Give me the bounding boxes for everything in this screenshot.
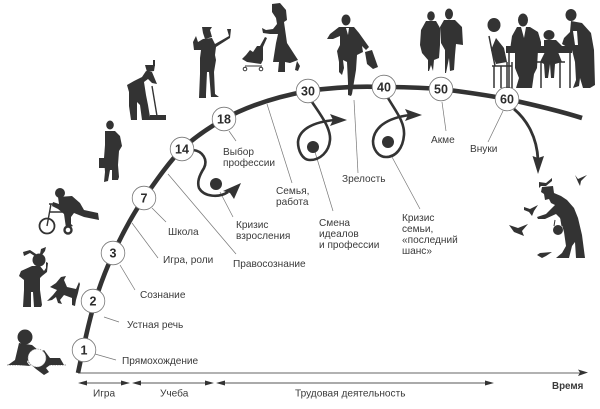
arrow from 60 (514, 109, 544, 174)
silhouette: crawling baby (7, 330, 66, 375)
silhouette: woman with stroller (242, 3, 300, 72)
stage labels: и профессии (319, 239, 379, 251)
silhouette: couple (420, 8, 463, 73)
stage labels: Внуки (470, 144, 497, 155)
stage labels: Прямохождение (122, 356, 199, 367)
silhouette: child on tricycle (40, 188, 99, 234)
stage labels: профессии (223, 157, 275, 169)
age markers: 2 (90, 294, 97, 308)
stage labels: Устная речь (127, 320, 183, 331)
stage labels: Акме (431, 135, 455, 146)
silhouette: policeman (193, 27, 231, 98)
age markers: 3 (110, 246, 117, 260)
stage labels: работа (276, 196, 309, 208)
stage labels: Зрелость (342, 174, 386, 185)
age markers (72, 75, 519, 362)
stage labels: Смена (319, 218, 350, 229)
silhouette: dog (47, 276, 80, 306)
stage labels: Сознание (140, 290, 186, 301)
period labels: Учеба (160, 388, 189, 400)
period arrows (78, 380, 494, 386)
silhouette: family at table (488, 9, 595, 88)
period labels: Игра (93, 388, 116, 400)
age markers: 7 (141, 192, 148, 206)
silhouette: running businessman (327, 14, 378, 96)
silhouette: man with briefcase (99, 120, 122, 182)
crisis loop at 14 (193, 150, 241, 199)
stage labels: Выбор (223, 146, 254, 158)
stage labels: Кризис (236, 220, 268, 231)
age markers: 30 (301, 84, 315, 98)
silhouette: old man feeding birds (537, 186, 585, 258)
life curve (78, 87, 582, 373)
age markers: 14 (175, 142, 189, 156)
stage labels: Игра, роли (163, 255, 213, 266)
silhouette: janitor with mop (127, 60, 166, 120)
crisis loop at 30 (298, 102, 347, 160)
stage labels: Правосознание (233, 259, 306, 270)
stage labels: взросления (236, 231, 290, 242)
age markers: 18 (217, 112, 231, 126)
age markers: 1 (81, 344, 88, 358)
period labels (93, 388, 405, 400)
stage labels: «последний (402, 235, 458, 246)
stage labels (122, 135, 497, 367)
stage labels: семьи, (402, 224, 433, 235)
crisis loop at 40 (373, 98, 422, 157)
birds (509, 175, 587, 258)
age markers: 40 (377, 80, 391, 94)
stage labels: Школа (168, 227, 199, 238)
leader lines (95, 100, 503, 360)
stage labels: Семья, (276, 186, 309, 197)
age markers: 50 (434, 82, 448, 96)
period labels: Трудовая деятельность (295, 388, 405, 400)
silhouette: girl (19, 247, 48, 307)
axis label: Время (552, 381, 584, 392)
age markers: 60 (500, 92, 514, 106)
axis: time arrow (78, 370, 588, 376)
stage labels: шанс» (402, 246, 432, 257)
stage labels: идеалов (319, 229, 359, 240)
stage labels: Кризис (402, 213, 434, 224)
